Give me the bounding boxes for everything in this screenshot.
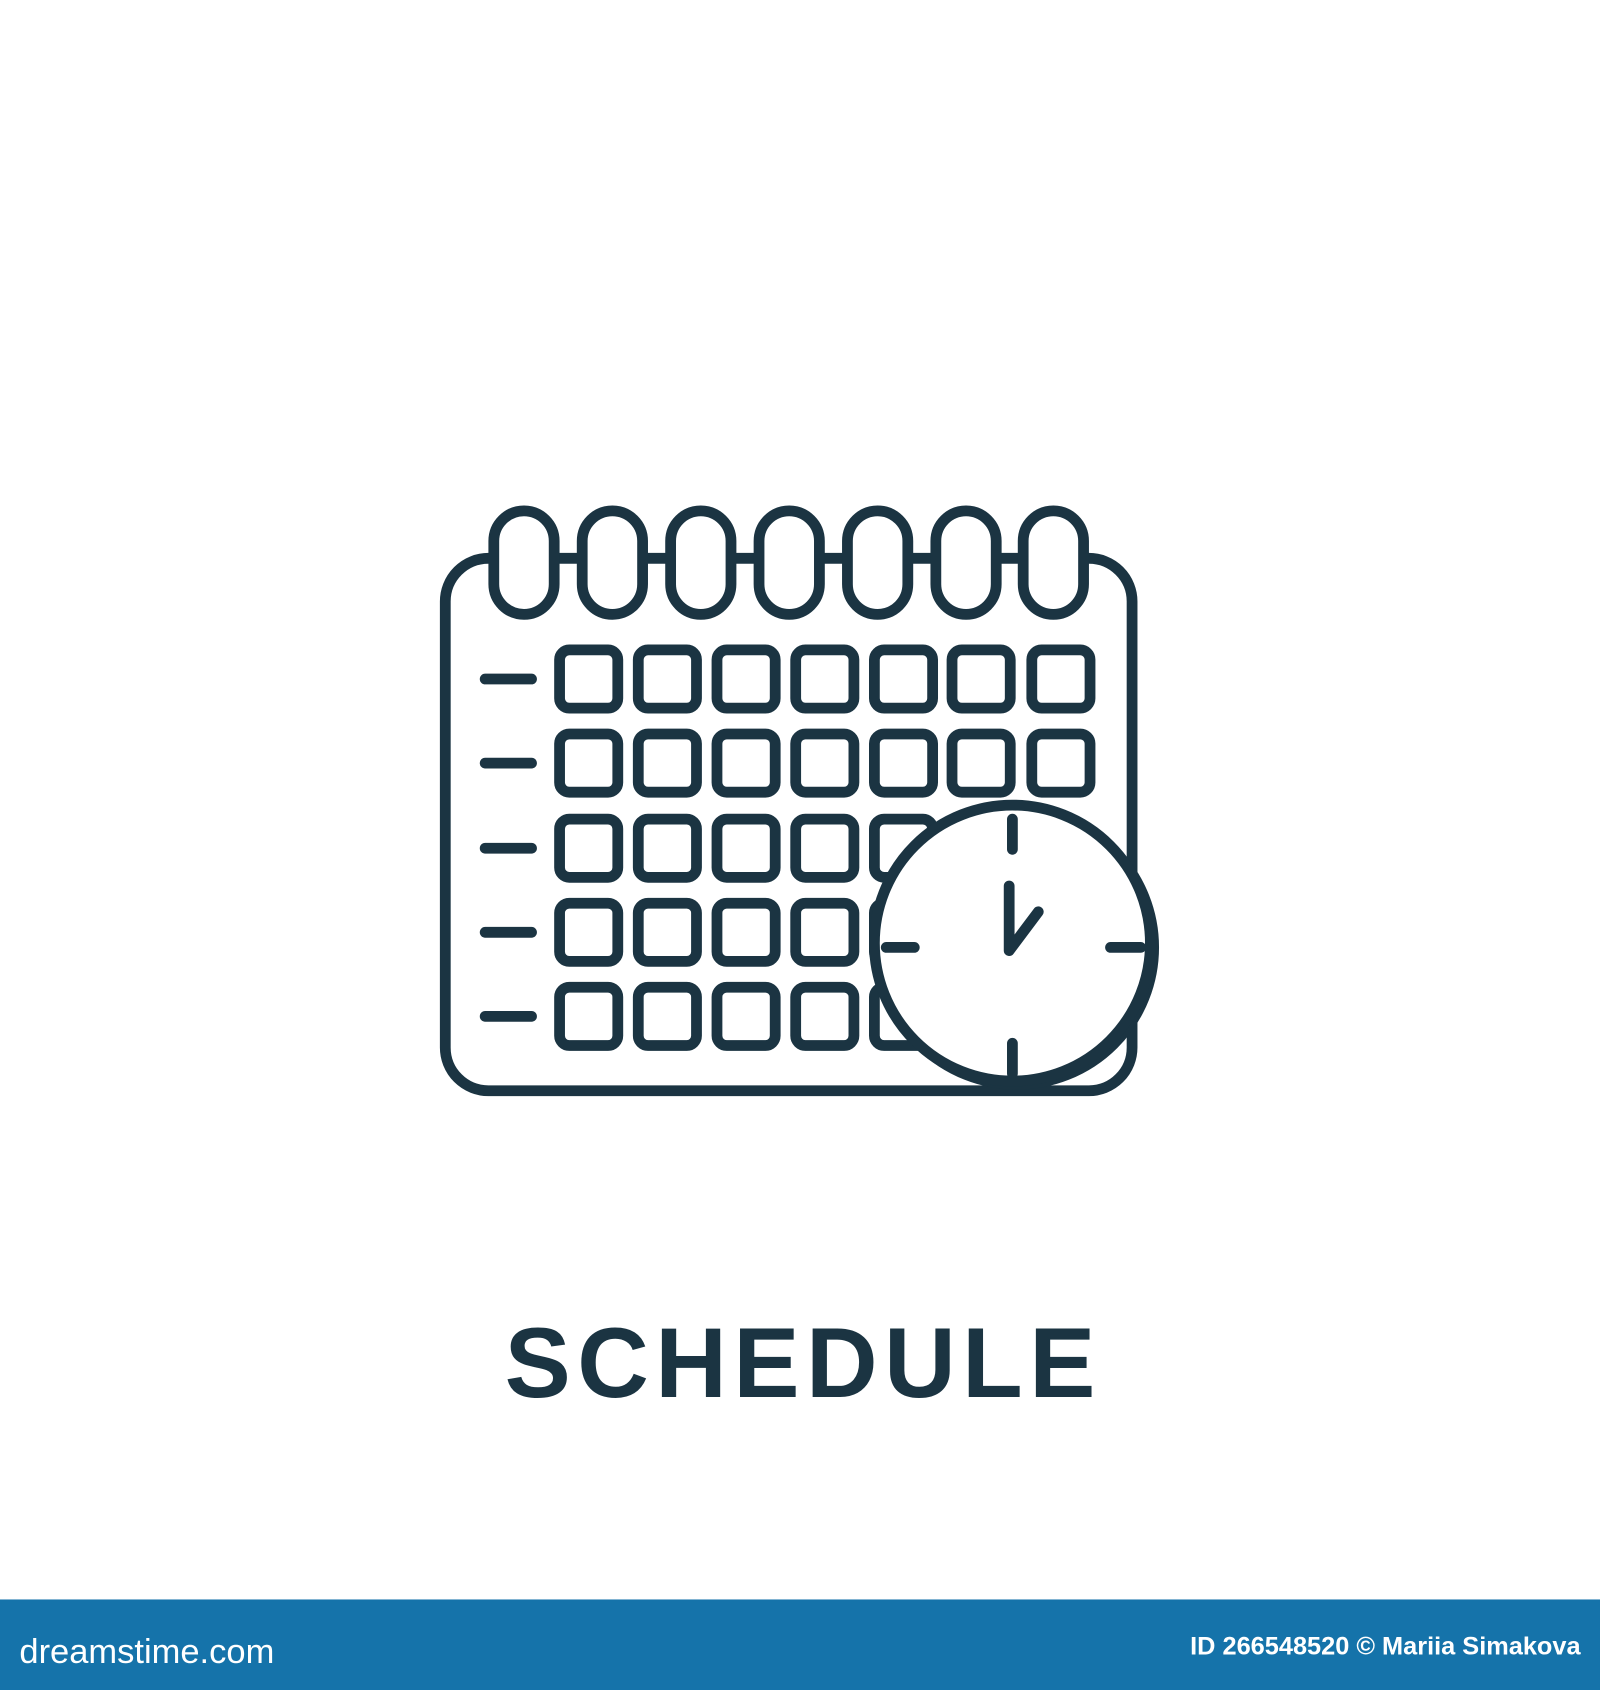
icon: calendar with clock	[445, 511, 1154, 1091]
calendar rings	[494, 511, 1084, 614]
title: SCHEDULE	[505, 1308, 1102, 1419]
clock shadow	[880, 811, 1154, 1084]
footer bar	[0, 1599, 1600, 1690]
footer brand: dreamstime.com	[19, 1633, 274, 1671]
calendar body	[445, 558, 1132, 1091]
clock ticks	[886, 819, 1141, 1073]
day grid	[560, 650, 1090, 1045]
footer credit: ID 266548520 © Mariia Simakova	[1190, 1632, 1582, 1660]
row dashes	[485, 679, 532, 1016]
clock face	[874, 805, 1150, 1081]
clock hands	[1009, 886, 1038, 951]
